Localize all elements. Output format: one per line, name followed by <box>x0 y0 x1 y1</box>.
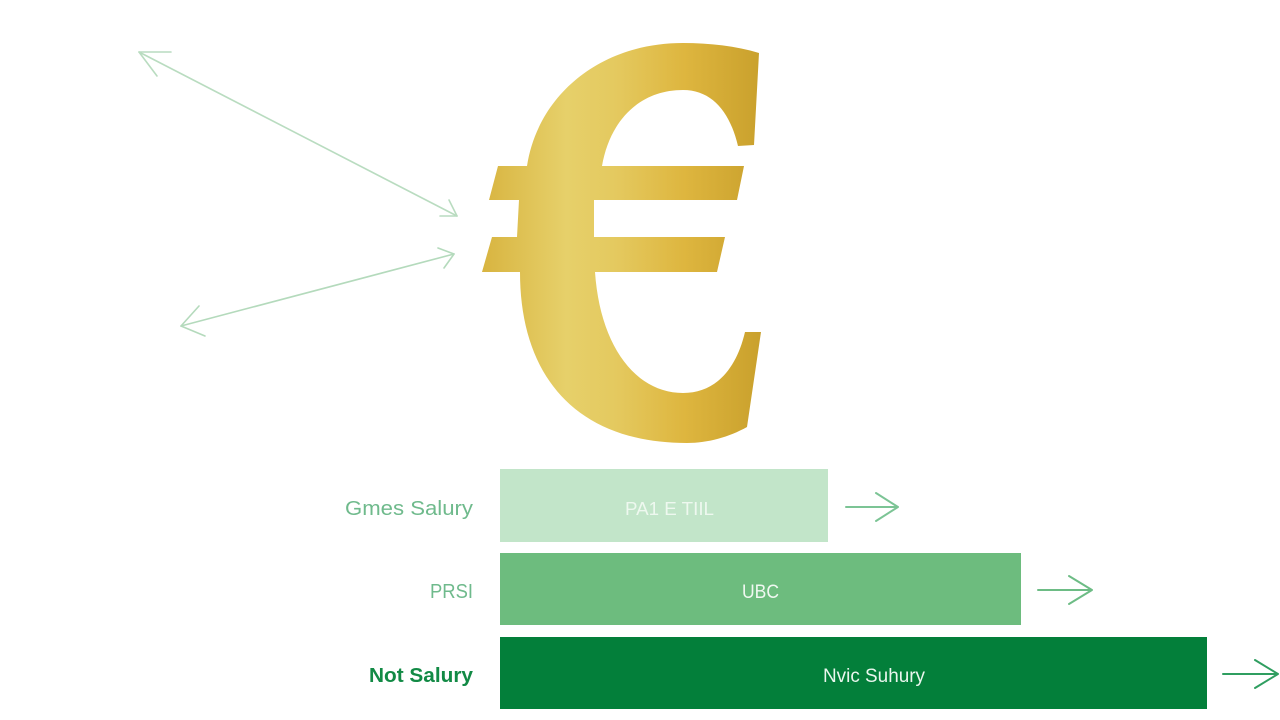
arrow: net salary <box>1223 660 1278 688</box>
label: gross salary: Gmes Salury <box>345 498 473 520</box>
row: net salary <box>369 637 1278 709</box>
bar: net salary <box>500 637 1207 709</box>
bar text: USC: UBC <box>742 582 779 603</box>
arrow: double-headed diagonal upper <box>139 52 457 216</box>
arrow: double-headed diagonal lower <box>181 248 454 336</box>
label: PRSI: PRSI <box>430 581 473 603</box>
bar: gross salary <box>500 469 828 542</box>
icon: gold euro symbol <box>482 43 761 443</box>
label: net salary: Not Salury <box>369 665 474 687</box>
bar text: PAYE tax: PA1 E TIIL <box>625 499 714 519</box>
bar: PRSI <box>500 553 1021 625</box>
row: PRSI <box>430 553 1092 625</box>
arrow: PRSI <box>1038 576 1092 604</box>
row: gross salary <box>345 469 898 542</box>
bar text: net salary: Nvic Suhury <box>823 666 925 687</box>
arrow: gross salary <box>846 493 898 521</box>
